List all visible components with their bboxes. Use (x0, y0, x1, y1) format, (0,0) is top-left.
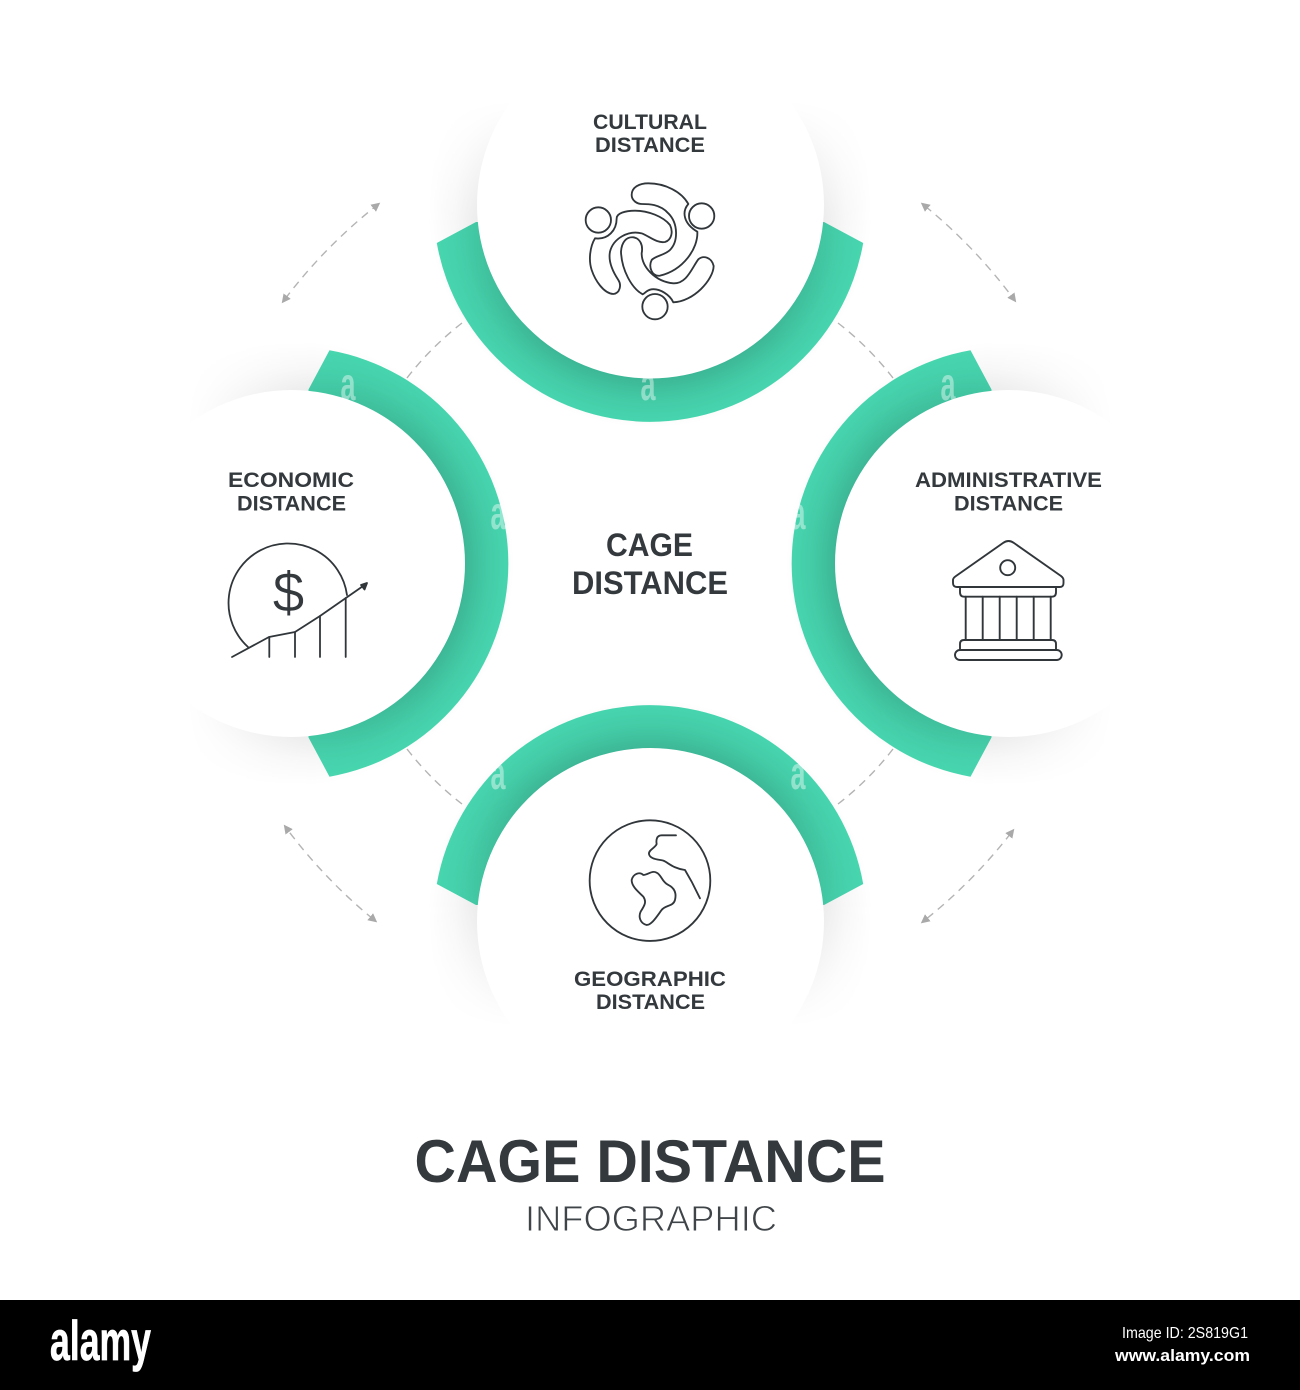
image id: Image ID: 2S819G1 (1122, 1325, 1248, 1342)
white circle: administrative (835, 390, 1182, 737)
label: cultural distance (593, 111, 707, 157)
label: cultural distance: DISTANCE (595, 134, 705, 157)
centre label: DISTANCE (572, 565, 728, 601)
alamy logo: alamy (50, 1309, 151, 1372)
circle shadow: administrative (803, 370, 1060, 758)
icon: dollar coin with growth chart: $ (273, 561, 304, 625)
watermark glyphs: a (790, 487, 806, 539)
centre label: CAGE (606, 527, 693, 563)
footer bar (0, 1300, 1300, 1390)
icon: dollar coin with growth chart (229, 543, 367, 657)
watermark glyphs: a (790, 747, 806, 799)
circle shadow: geographic (456, 716, 844, 973)
panel: economic distance (228, 350, 508, 777)
label: geographic distance (574, 968, 726, 1014)
green arc: cultural (437, 222, 863, 422)
label: geographic distance: GEOGRAPHIC (574, 968, 726, 991)
arrow: top-left double-headed dashed arc (285, 206, 376, 299)
green arc: economic (308, 350, 508, 777)
subtitle: INFOGRAPHIC (525, 1198, 777, 1239)
centre label (572, 527, 728, 601)
icon: people circle (586, 183, 714, 319)
watermark glyphs: a (640, 358, 656, 410)
watermark glyphs: a (490, 487, 506, 539)
panel: cultural distance (436, 114, 864, 422)
watermark glyphs: a (340, 358, 356, 410)
inner dashed connector arcs (407, 323, 893, 804)
panel: geographic distance (436, 705, 864, 1009)
arrow: bottom-left double-headed dashed arc (287, 829, 373, 919)
watermark glyphs: a (940, 358, 956, 410)
label: cultural distance: CULTURAL (593, 111, 707, 134)
watermark glyphs (340, 358, 956, 799)
icon: globe (590, 820, 710, 941)
icon: bank building (953, 541, 1064, 660)
label: geographic distance: DISTANCE (596, 991, 705, 1014)
label: economic distance: DISTANCE (237, 492, 346, 516)
title: CAGE DISTANCE (414, 1128, 886, 1195)
arrow: bottom-right double-headed dashed arc (925, 833, 1011, 920)
circle shadow: cultural (456, 154, 844, 410)
circle shadow: economic (240, 370, 497, 758)
white circle: geographic (477, 748, 824, 1095)
watermark glyphs: a (490, 747, 506, 799)
white circle: economic (118, 390, 465, 737)
website: www.alamy.com (1114, 1346, 1250, 1365)
green arc: administrative (792, 350, 992, 777)
label: administrative distance: ADMINISTRATIVE (915, 469, 1102, 492)
label: economic distance: ECONOMIC (228, 469, 354, 492)
arrow: top-right double-headed dashed arc (925, 206, 1013, 298)
white circle: cultural (477, 32, 824, 378)
green arc: geographic (437, 705, 863, 905)
label: administrative distance (915, 469, 1102, 516)
label: administrative distance: DISTANCE (954, 492, 1063, 516)
panel: administrative distance (792, 350, 1102, 777)
label: economic distance (228, 469, 354, 516)
